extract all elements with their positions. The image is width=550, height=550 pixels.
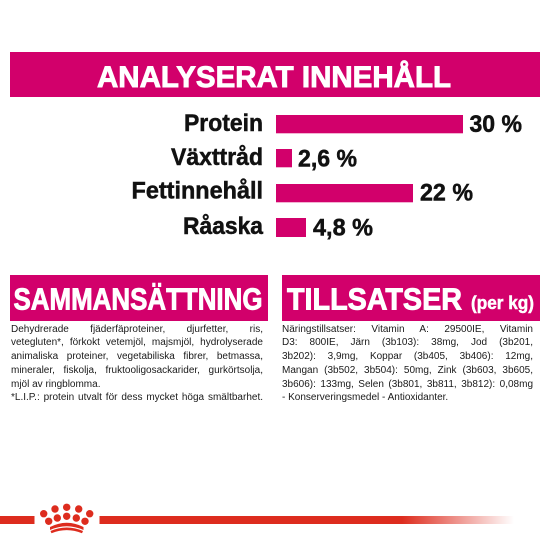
text block: sammansättning: animaliska proteiner, vegetabiliska fibrer, betmassa,	[11, 351, 263, 362]
row: fettinnehåll	[132, 178, 473, 206]
text block: tillsatser: D3: 800IE, Järn (3b103): 38mg, Jod (3b201,	[282, 337, 533, 348]
text block: sammansättning: mineraler, fiskolja, fruktooligosackarider, gurkörtsolja,	[11, 365, 263, 376]
text block: sammansättning	[11, 324, 263, 403]
heading: tillsatser: (per kg)	[471, 293, 534, 313]
text block: sammansättning: *L.I.P.: protein utvalt för dess mycket höga smältbarhet.	[11, 392, 263, 403]
row: råaska: 4,8 %	[313, 214, 373, 242]
text block: tillsatser: Näringstillsatser: Vitamin A: 29500IE, Vitamin	[282, 324, 533, 334]
row: växttråd: 2,6 %	[298, 146, 357, 172]
text block: tillsatser: Mangan (3b502, 3b504): 50mg, Zink (3b603, 3b605,	[282, 365, 533, 376]
row: fettinnehåll: Fettinnehåll	[132, 178, 263, 204]
heading: sammansättning: SAMMANSÄTTNING	[14, 281, 262, 316]
text block: sammansättning: vetegluten*, förkokt vetemjöl, majsmjöl, hydrolyserade	[11, 337, 263, 348]
row: protein: Protein	[184, 110, 263, 137]
text block: tillsatser: 3b606): 133mg, Selen (3b801, 3b811, 3b812): 0,08mg	[282, 379, 533, 390]
row: protein	[184, 110, 522, 138]
row: växttråd: Växttråd	[171, 144, 263, 171]
text block: tillsatser	[282, 324, 533, 403]
text block: tillsatser: 3b202): 3,9mg, Koppar (3b405, 3b406): 12mg,	[282, 351, 533, 362]
row: råaska: Råaska	[183, 213, 264, 240]
heading: tillsatser	[282, 275, 540, 321]
banner: analyserat innehåll: ANALYSERAT INNEHÅLL	[97, 61, 451, 94]
heading: sammansättning	[10, 275, 268, 321]
text block: tillsatser: - Konserveringsmedel - Antioxidanter.	[282, 392, 448, 403]
icon: royal canin crown	[40, 504, 93, 533]
row: protein: 30 %	[470, 111, 522, 138]
row: råaska	[183, 213, 373, 242]
banner: analyserat innehåll	[10, 52, 540, 97]
text block: sammansättning: mjöl av ringblomma.	[11, 379, 100, 390]
text block: sammansättning: Dehydrerade fjäderfäproteiner, djurfetter, ris,	[11, 324, 263, 334]
row: fettinnehåll: 22 %	[420, 180, 473, 206]
footer line with gradient	[0, 516, 514, 524]
row: växttråd	[171, 144, 357, 172]
heading: tillsatser: TILLSATSER	[287, 281, 462, 316]
